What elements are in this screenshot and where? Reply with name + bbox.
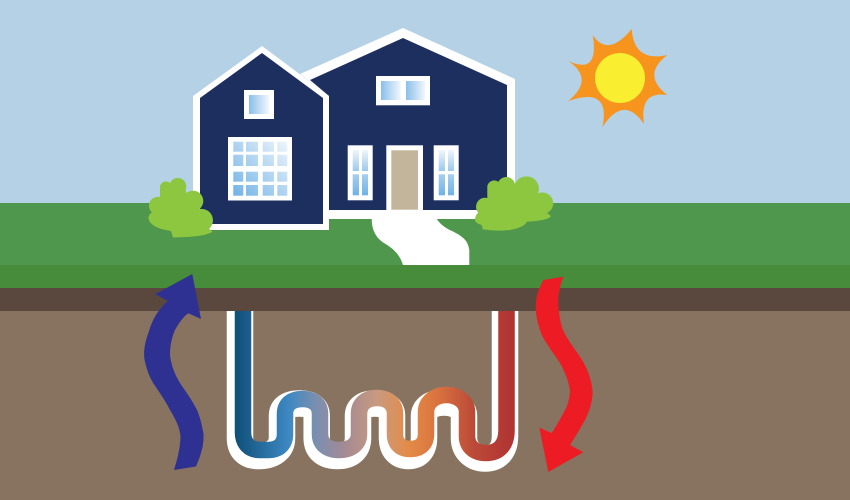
- main wing wall: [310, 38, 507, 210]
- pipe white outline: [240, 311, 505, 458]
- right bush: [475, 176, 553, 231]
- gable small window: [244, 90, 274, 119]
- main wing outline: [300, 28, 515, 219]
- icon: sun: [568, 29, 667, 127]
- gable wing outline: [193, 46, 329, 230]
- sky: [0, 0, 850, 204]
- house: [193, 28, 515, 230]
- arrow: heat rising to house: [144, 274, 204, 470]
- topsoil band: [0, 288, 850, 311]
- door: [386, 145, 423, 210]
- left bush: [148, 178, 213, 238]
- arrow: heat sinking to ground: [536, 277, 593, 472]
- soil ground: [0, 311, 850, 500]
- pipe gradient tube: [243, 311, 506, 453]
- right tall window: [434, 145, 459, 200]
- dormer window: [376, 76, 430, 105]
- gable wing wall: [200, 53, 323, 224]
- front path: [372, 218, 469, 265]
- large grid window: [228, 137, 292, 200]
- left tall window: [348, 145, 373, 200]
- ground loop pipe: [240, 311, 506, 458]
- lawn: [0, 203, 850, 266]
- dark grass band: [0, 265, 850, 288]
